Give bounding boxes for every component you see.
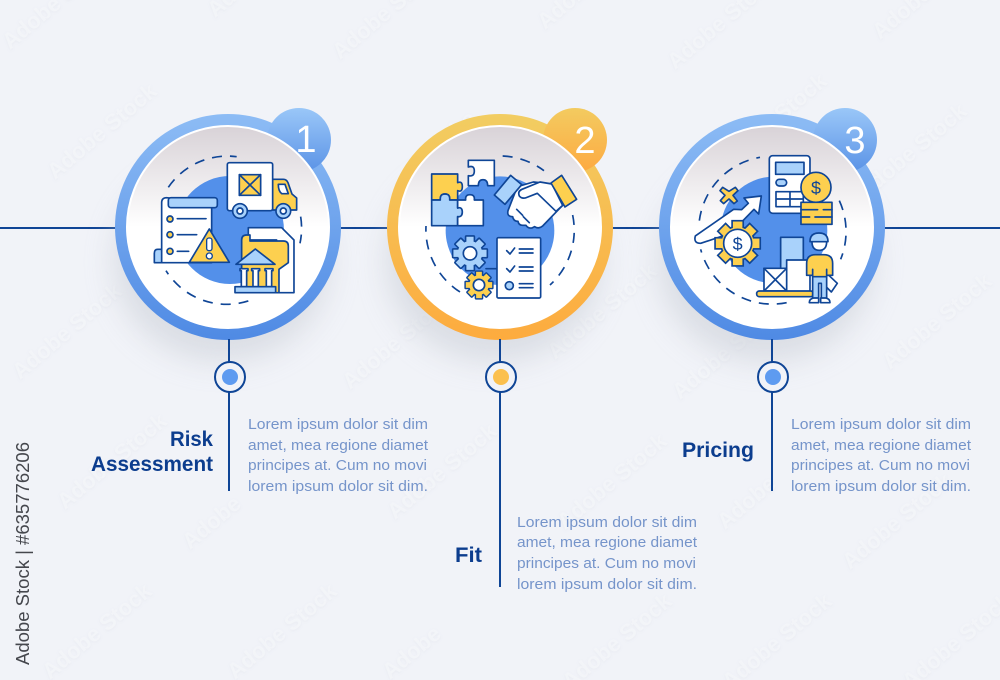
heading: Risk Assessment: Assessment [91, 452, 213, 476]
icon: worker [807, 233, 837, 303]
icon: handshake [494, 175, 577, 228]
text block: step 3 description: principes at. Cum no movi [791, 458, 970, 474]
badge: number 1 [267, 108, 331, 172]
badge: number 1: 1 [295, 119, 317, 161]
heading: Risk Assessment: Risk [170, 427, 213, 451]
text block: step 1 description: Lorem ipsum dolor sit dim [248, 417, 428, 433]
stock id caption: Adobe Stock | #635776206 [13, 442, 33, 665]
icon: calculator and coins [769, 156, 832, 224]
text: Adobe Stock [382, 418, 502, 524]
node: step 2 marker [486, 362, 516, 392]
heading: Risk Assessment [91, 427, 213, 476]
text: Adobe [412, 106, 481, 169]
icon: rising arrow [695, 196, 761, 243]
text: Adobe [712, 471, 781, 534]
text block: step 2 description [517, 515, 697, 593]
badge: number 3: 3 [844, 120, 866, 162]
icon: dollar gear: $ [733, 234, 743, 254]
text block: step 2 description: lorem ipsum dolor sit dim. [517, 577, 697, 593]
timeline stem: step 3 [758, 339, 788, 491]
text block: step 2 description: Lorem ipsum dolor sit dim [517, 515, 697, 531]
text: Adobe Stock [42, 78, 162, 184]
icon: calculator and coins: $ [811, 178, 821, 198]
icon: checklist scroll [154, 198, 217, 263]
icon: gears [453, 237, 504, 298]
horizontal connector line [0, 227, 1000, 229]
text: Adobe [177, 491, 246, 554]
heading: Pricing: Pricing [682, 438, 754, 462]
text: Adobe Stock [552, 428, 672, 534]
icon: folder and bank [235, 228, 294, 293]
text: Adobe Stock [877, 268, 997, 374]
panel: step 2 circle [386, 108, 613, 362]
text block: step 3 description [791, 417, 971, 495]
text block: step 2 description: principes at. Cum no movi [517, 556, 696, 572]
text block: step 1 description: amet, mea regione diamet [248, 438, 428, 454]
text: Adobe Stock [542, 258, 662, 364]
timeline stem: step 2 [486, 339, 516, 587]
text block: step 3 description: Lorem ipsum dolor sit dim [791, 417, 971, 433]
text: Adobe Stock [667, 298, 787, 404]
text block: step 3 description: lorem ipsum dolor sit dim. [791, 479, 971, 495]
icon: puzzle pieces [432, 160, 494, 226]
text: Adobe Stock [7, 278, 127, 384]
icon: checklist document [497, 238, 541, 298]
badge: number 2: 2 [574, 120, 596, 162]
icon: warning triangle [189, 229, 229, 262]
node: step 3 marker [758, 362, 788, 392]
node: step 1 marker [215, 362, 245, 392]
icon: dollar gear [716, 222, 759, 265]
icon: risk assessment illustration [154, 156, 302, 304]
panel: step 1 circle [114, 108, 341, 362]
icon: warehouse boxes [757, 237, 813, 297]
icon: fit illustration [426, 156, 577, 298]
heading: Fit: Fit [455, 543, 482, 567]
timeline stem: step 1 [215, 339, 245, 491]
text block: step 2 description: amet, mea regione diamet [517, 535, 697, 551]
text block: step 1 description: principes at. Cum no movi [248, 458, 427, 474]
text: Adobe Stock [837, 468, 957, 574]
text: Adobe Stock [337, 288, 457, 394]
text: Adobe Stock [852, 98, 972, 204]
badge: number 3 [813, 108, 877, 172]
icon: cross mark [720, 187, 738, 204]
text block: step 1 description [248, 417, 428, 495]
badge: number 2 [543, 108, 607, 172]
text block: step 1 description: lorem ipsum dolor sit dim. [248, 479, 428, 495]
text block: step 3 description: amet, mea regione diamet [791, 438, 971, 454]
icon: delivery truck [227, 163, 297, 218]
icon: pricing illustration [695, 156, 846, 304]
text: Adobe Stock [52, 408, 172, 514]
panel: step 3 circle [658, 108, 885, 362]
text: Adobe Stock [712, 68, 832, 174]
